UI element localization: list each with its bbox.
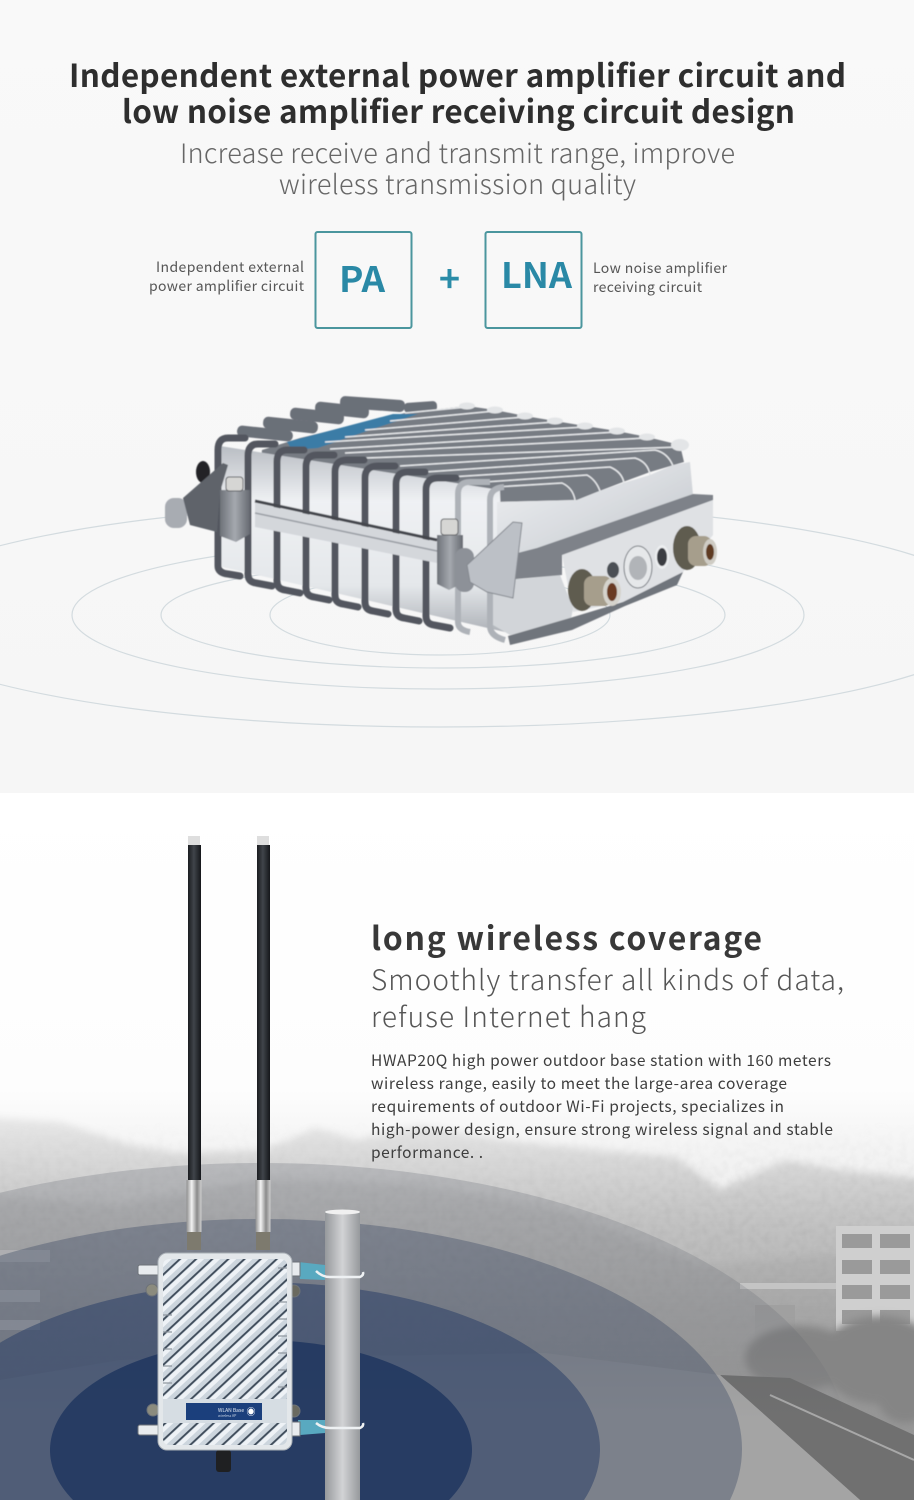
subheading: refuse Internet hang [371,996,646,1036]
label plate: wireless AP [218,1414,237,1419]
text: PA description [149,257,305,296]
subtitle [180,132,735,202]
box: LNA [486,232,582,328]
upper end panel [497,462,693,560]
antenna right [256,836,270,1250]
crossbar [255,501,437,563]
body text: requirements of outdoor Wi-Fi projects, specializes in [371,1095,784,1117]
signal ripple rings [0,503,914,727]
misty mountains [0,1117,914,1500]
router photo: finned outdoor enclosure [165,396,717,645]
cable gland [216,1450,231,1472]
body text [371,1049,833,1163]
antenna left [186,836,202,1250]
subheading [371,959,844,1036]
posts and screws [220,477,463,590]
ports [568,526,717,611]
outdoor access point [138,1253,300,1472]
pole clamps [316,1271,363,1428]
box: PA [316,232,412,328]
panel: upper section background [0,0,914,793]
left background buildings [0,1250,50,1330]
text: LNA description [593,258,728,297]
road and ground [578,1374,914,1500]
label plate: WLAN Base [218,1407,244,1414]
plus sign: + [439,251,460,303]
rear fin tabs [237,396,437,442]
title [69,51,846,133]
label plate: ◉ [246,1405,256,1418]
right-hand pale fins [458,482,505,640]
side ticks [163,1268,287,1387]
label plate [186,1403,262,1420]
title: low noise amplifier receiving circuit design [122,87,795,133]
trees [745,1316,914,1423]
text: LNA description: receiving circuit [593,277,703,297]
side plate with ports [562,500,713,612]
subtitle: Increase receive and transmit range, improve [180,132,735,171]
top fin surface [260,406,684,502]
teal pole brackets [298,1262,325,1435]
body text: HWAP20Q high power outdoor base station with 160 meters [371,1049,831,1071]
panel: lower section with landscape photo [0,1114,914,1500]
dark seal band [505,494,713,580]
lower body [493,575,573,635]
fin tip caps [459,402,689,451]
hill texture [0,1100,914,1500]
housing [158,1253,292,1450]
box: PA: PA [339,252,386,303]
box: LNA: LNA [501,248,573,299]
label row [163,1399,287,1423]
side mounting ears [138,1262,300,1436]
left bracket and knob [165,461,228,532]
right bracket and knob [455,522,522,598]
sky gradient [96,1128,914,1188]
subtitle: wireless transmission quality [279,163,636,202]
text: LNA description: Low noise amplifier [593,258,728,278]
blue product label [287,414,418,450]
subheading: Smoothly transfer all kinds of data, [371,959,844,999]
mounting pole [325,1210,360,1500]
building [740,1226,914,1331]
body text: high-power design, ensure strong wireless signal and stable [371,1118,833,1140]
fin highlights [325,407,680,500]
text: PA description: power amplifier circuit [149,276,305,296]
front long face [218,446,505,632]
body text: wireless range, easily to meet the large-area coverage [371,1072,787,1094]
body text: performance. . [371,1141,483,1163]
coverage rings [0,1163,849,1500]
text: PA description: Independent external [156,257,304,277]
front fins [218,438,456,628]
title: Independent external power amplifier circuit and [69,51,846,97]
heading: long wireless coverage: long wireless coverage [371,914,762,960]
